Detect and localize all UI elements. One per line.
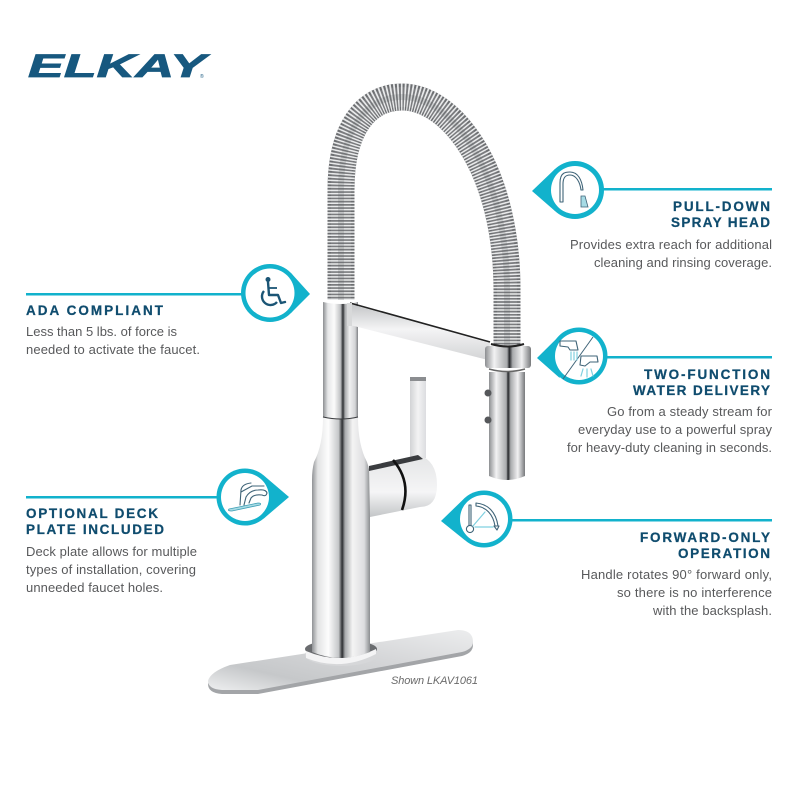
description: types of installation, covering [26,562,196,577]
connector line [26,293,244,296]
icon badge: stream and spray [537,328,608,384]
spray head [484,344,531,480]
base ring [305,640,377,666]
heading: WATER DELIVERY [633,383,770,398]
description [581,567,772,618]
icon badge: handle rotation [441,490,512,548]
coil hose [341,97,507,346]
description: Go from a steady stream for [607,404,773,419]
description [26,544,197,595]
connector line [604,356,772,358]
upper column [323,302,358,420]
description: for heavy-duty cleaning in seconds. [567,440,772,455]
description [26,324,200,357]
description: unneeded faucet holes. [26,580,163,595]
description: needed to activate the faucet. [26,342,200,357]
heading: ADA COMPLIANT [26,303,164,318]
connector line [26,496,219,498]
logo: Elkay: ELKAY [28,48,210,84]
deck plate [208,630,473,694]
heading [633,367,770,398]
logo: Elkay: ® [200,73,204,80]
heading: PLATE INCLUDED [26,522,164,537]
heading: OPTIONAL DECK [26,506,158,521]
heading: PULL-DOWN [673,199,770,214]
description [570,237,772,270]
description: so there is no interference [617,585,772,600]
callout: forward-only operation [441,490,772,618]
callout: pull-down spray head [532,161,772,270]
description: Less than 5 lbs. of force is [26,324,178,339]
heading: OPERATION [678,546,770,561]
description: Deck plate allows for multiple [26,544,197,559]
icon badge: wheelchair [241,264,310,322]
spout arm [347,303,490,360]
faucet illustration [208,97,531,694]
connector line [509,519,772,522]
icon badge: spray head [532,161,604,219]
heading [671,199,770,230]
heading: TWO-FUNCTION [644,367,770,382]
caption: model shown: Shown LKAV1061 [391,675,478,687]
description: Handle rotates 90° forward only, [581,567,772,582]
callout: optional deck plate [26,468,289,595]
description: everyday use to a powerful spray [578,422,772,437]
icon badge: deck plate faucet [216,468,289,526]
heading: SPRAY HEAD [671,215,770,230]
heading [26,506,164,537]
description: cleaning and rinsing coverage. [594,255,772,270]
logo: Elkay [28,48,210,84]
description: Provides extra reach for additional [570,237,772,252]
lever handle [369,377,437,517]
description [567,404,773,455]
main body column [312,417,370,658]
description: with the backsplash. [652,603,772,618]
callout: ADA compliant [26,264,310,357]
connector line [600,188,772,190]
callout: two-function water delivery [537,328,773,455]
heading [640,530,770,561]
heading: FORWARD-ONLY [640,530,770,545]
